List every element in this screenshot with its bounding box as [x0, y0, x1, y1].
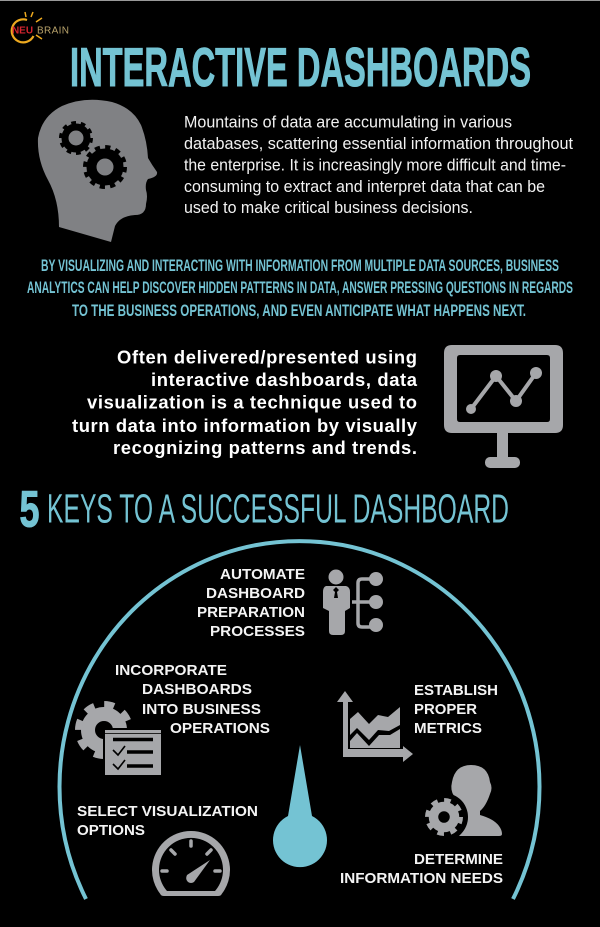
- intro paragraph: [184, 112, 573, 217]
- item: incorporate: DASHBOARDS: [142, 681, 252, 698]
- item: determine needs: [340, 765, 503, 887]
- bold paragraph: Often delivered/presented using: [117, 346, 417, 368]
- gauge needle: [273, 745, 327, 867]
- item: automate: PROCESSES: [210, 623, 305, 640]
- bold paragraph: [72, 346, 418, 458]
- item: automate: PREPARATION: [197, 604, 305, 621]
- item: incorporate: INCORPORATE: [115, 662, 227, 679]
- teal statement: [27, 256, 573, 320]
- item: select visualization: [77, 803, 258, 896]
- intro paragraph: databases, scattering essential information throughout: [184, 134, 573, 153]
- item: establish metrics: [337, 682, 498, 762]
- icon: gear with checklist: [78, 704, 163, 777]
- intro paragraph: the enterprise. It is increasingly more difficult and time-: [184, 156, 566, 174]
- heading: 5 keys: [20, 480, 509, 538]
- item: determine needs: INFORMATION NEEDS: [340, 870, 503, 887]
- item: incorporate: [78, 662, 270, 777]
- icon: area chart with arrows: [337, 691, 413, 762]
- icon: speedometer: [152, 831, 230, 896]
- item: automate: [197, 566, 383, 640]
- icon: person with branches: [323, 570, 383, 635]
- item: incorporate: OPERATIONS: [170, 720, 270, 737]
- logo: NeuBrain: [12, 12, 69, 42]
- logo: NeuBrain: NEU: [12, 24, 33, 36]
- item: select visualization: SELECT VISUALIZATION: [77, 803, 258, 820]
- bold paragraph: recognizing patterns and trends.: [113, 437, 417, 458]
- item: determine needs: DETERMINE: [414, 851, 503, 868]
- icon: head with gears: [38, 100, 157, 242]
- bold paragraph: interactive dashboards, data: [151, 369, 418, 390]
- intro paragraph: Mountains of data are accumulating in various: [184, 112, 512, 132]
- item: automate: DASHBOARD: [206, 585, 305, 602]
- gauge arc: [60, 541, 540, 899]
- icon: monitor with line chart: [444, 345, 563, 468]
- intro paragraph: used to make critical business decisions.: [184, 198, 473, 217]
- item: establish metrics: ESTABLISH: [414, 682, 498, 699]
- item: automate: AUTOMATE: [220, 566, 305, 583]
- item: incorporate: INTO BUSINESS: [142, 701, 261, 718]
- item: establish metrics: PROPER: [414, 701, 477, 718]
- item: select visualization: OPTIONS: [77, 822, 145, 839]
- bold paragraph: visualization is a technique used to: [87, 392, 417, 412]
- logo: NeuBrain: BRAIN: [37, 26, 69, 36]
- bold paragraph: turn data into information by visually: [72, 415, 418, 436]
- icon: person with gear: [420, 765, 502, 841]
- item: establish metrics: METRICS: [414, 720, 482, 737]
- intro paragraph: consuming to extract and interpret data that can be: [184, 177, 545, 196]
- heading: 5 keys: 5: [20, 480, 40, 538]
